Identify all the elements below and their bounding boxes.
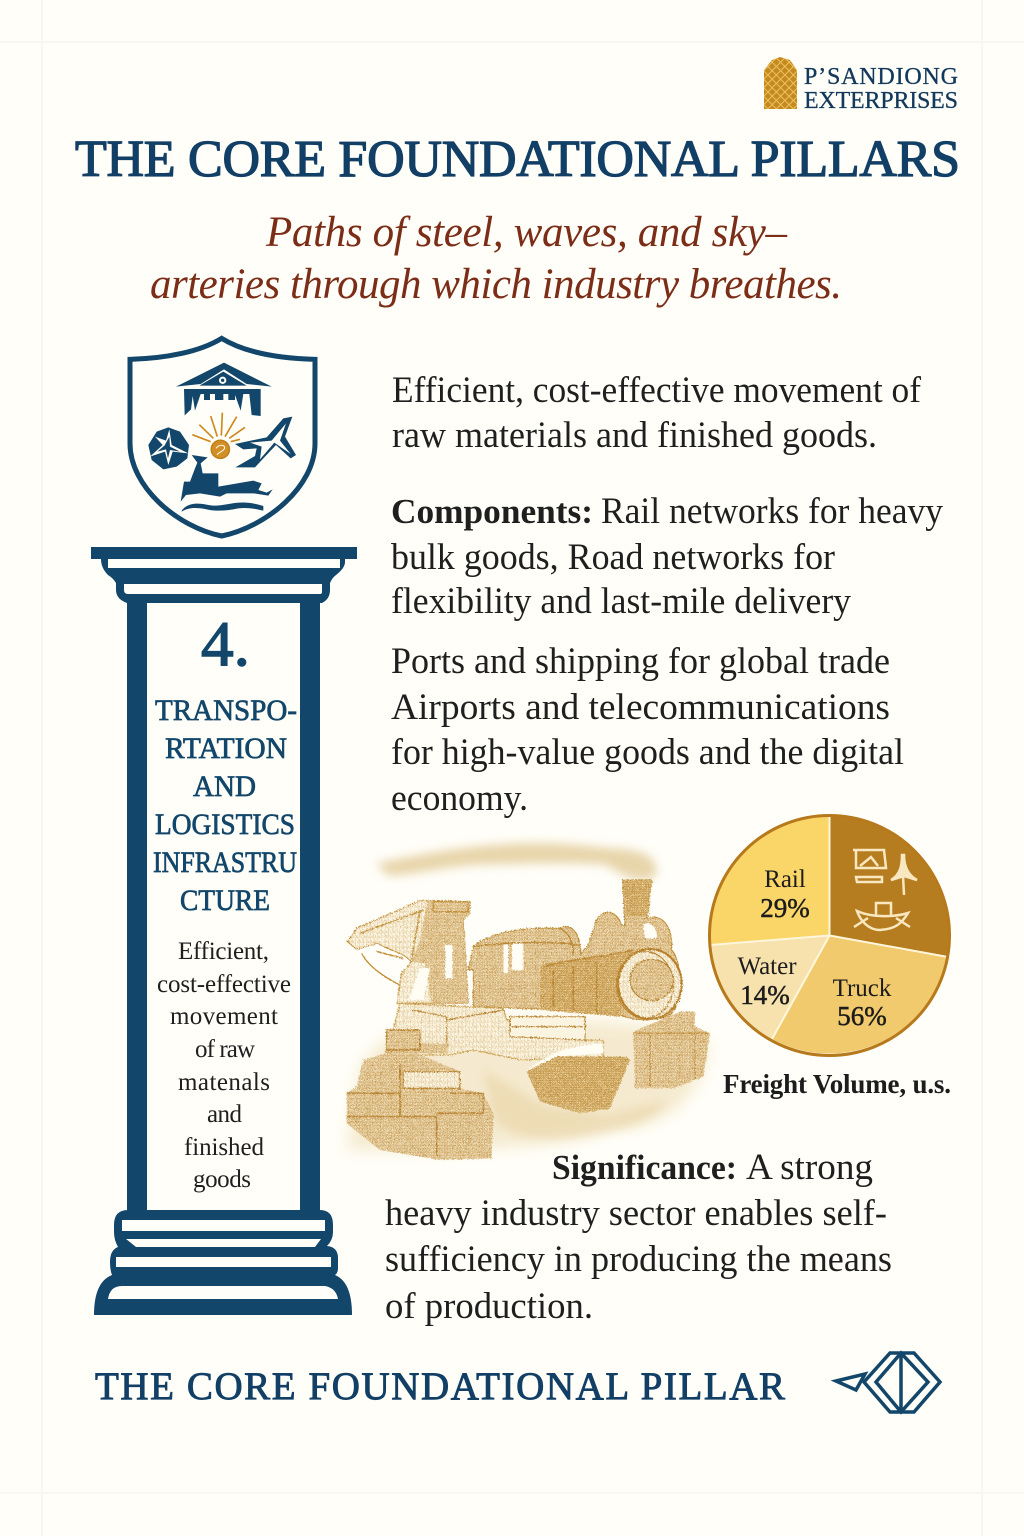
icon: star gear: [148, 427, 189, 469]
pillar heading: RTATION: [165, 732, 287, 765]
pillar description: Efficient,: [178, 938, 269, 965]
components text: Rail networks for heavy: [601, 491, 943, 532]
cargo stack: [347, 1030, 493, 1160]
pillar description: finished: [184, 1134, 264, 1161]
pillar number: 4.: [201, 609, 250, 679]
pie labels: Water: [737, 953, 797, 980]
intro text: [392, 370, 922, 456]
pie labels: Rail: [764, 866, 806, 893]
pie labels: [737, 866, 892, 1031]
subtitle: [150, 209, 842, 308]
slice: air, water, pipeline icons: [830, 814, 950, 957]
pillar description: goods: [193, 1166, 251, 1193]
ports and airports text: [391, 641, 904, 819]
logo: P'Sandiong Exterprises: EXTERPRISES: [804, 88, 958, 114]
pillar heading: INFRASTRU: [153, 846, 297, 879]
icon: waves: [182, 503, 263, 512]
pillar heading: [153, 694, 297, 917]
significance text: Significance:: [552, 1148, 737, 1187]
soft shadow ground: [347, 1019, 710, 1150]
chart caption: Freight Volume, u.s.: [723, 1069, 951, 1099]
significance text: A strong: [746, 1147, 873, 1188]
icon: temple: [176, 363, 272, 416]
pie labels: 56%: [837, 1001, 887, 1031]
pillar shaft: [127, 600, 147, 1215]
icon: transport glyphs: [853, 850, 917, 930]
icon: transport shield crest: [130, 338, 315, 536]
pillar description: cost-effective: [157, 971, 291, 998]
ports and airports text: economy.: [391, 778, 528, 819]
ports and airports text: Ports and shipping for global trade: [391, 641, 890, 682]
logo: P'Sandiong Exterprises: [764, 57, 958, 114]
intro text: Efficient, cost-effective movement of: [392, 370, 922, 411]
icon: ship: [181, 455, 273, 502]
locomotive cab and body: [468, 880, 680, 1020]
pillar heading: TRANSPO-: [155, 694, 297, 727]
dock: [393, 1003, 603, 1060]
pillar capital: [91, 547, 357, 603]
pie labels: 14%: [740, 980, 790, 1010]
pillar heading: AND: [193, 770, 256, 803]
components text: bulk goods, Road networks for: [391, 537, 835, 578]
icon: gold woven emblem: [764, 57, 797, 109]
pillar base: [94, 1210, 352, 1315]
components text: [391, 491, 943, 622]
pillar: [91, 547, 357, 1315]
components text: flexibility and last-mile delivery: [391, 581, 851, 622]
ports and airports text: for high-value goods and the digital: [391, 732, 904, 773]
components text: Components:: [391, 492, 593, 531]
pillar heading: LOGISTICS: [155, 808, 295, 841]
logo: P'Sandiong Exterprises: P’SANDIONG: [804, 64, 958, 90]
slice: rail 29%: [710, 814, 830, 945]
icon: diamond with arrow: [836, 1353, 940, 1412]
icon: airplane: [235, 417, 296, 467]
significance text: of production.: [385, 1286, 593, 1327]
significance text: heavy industry sector enables self-: [385, 1193, 887, 1234]
intro text: raw materials and finished goods.: [392, 415, 877, 456]
slice: water 14%: [710, 936, 830, 1039]
slice: truck 56%: [772, 936, 948, 1054]
pie labels: Truck: [833, 975, 892, 1002]
illustration: locomotive, crane, ship and cargo: [347, 843, 710, 1160]
pillar description: movement: [170, 1003, 278, 1030]
significance text: [385, 1147, 892, 1327]
pie labels: 29%: [760, 893, 810, 923]
smoke: [377, 843, 657, 880]
significance text: sufficiency in producing the means: [385, 1239, 892, 1280]
pie chart: freight volume: [710, 814, 950, 1056]
title: THE CORE FOUNDATIONAL PILLARS: [75, 131, 960, 188]
subtitle: Paths of steel, waves, and sky–: [265, 209, 788, 256]
pillar heading: CTURE: [180, 884, 270, 917]
pillar description: [157, 938, 291, 1193]
footer title: THE CORE FOUNDATIONAL PILLAR: [95, 1365, 785, 1408]
water: [483, 1070, 667, 1138]
ship hull: [527, 1057, 630, 1113]
pillar description: matenals: [178, 1069, 270, 1096]
ports and airports text: Airports and telecommunications: [391, 687, 890, 728]
crane: [347, 901, 470, 1003]
icon: sun: [192, 413, 245, 458]
subtitle: arteries through which industry breathes.: [150, 261, 842, 308]
locomotive boiler: [618, 949, 682, 1019]
pillar description: and: [207, 1101, 242, 1128]
pillar description: of raw: [195, 1036, 255, 1063]
